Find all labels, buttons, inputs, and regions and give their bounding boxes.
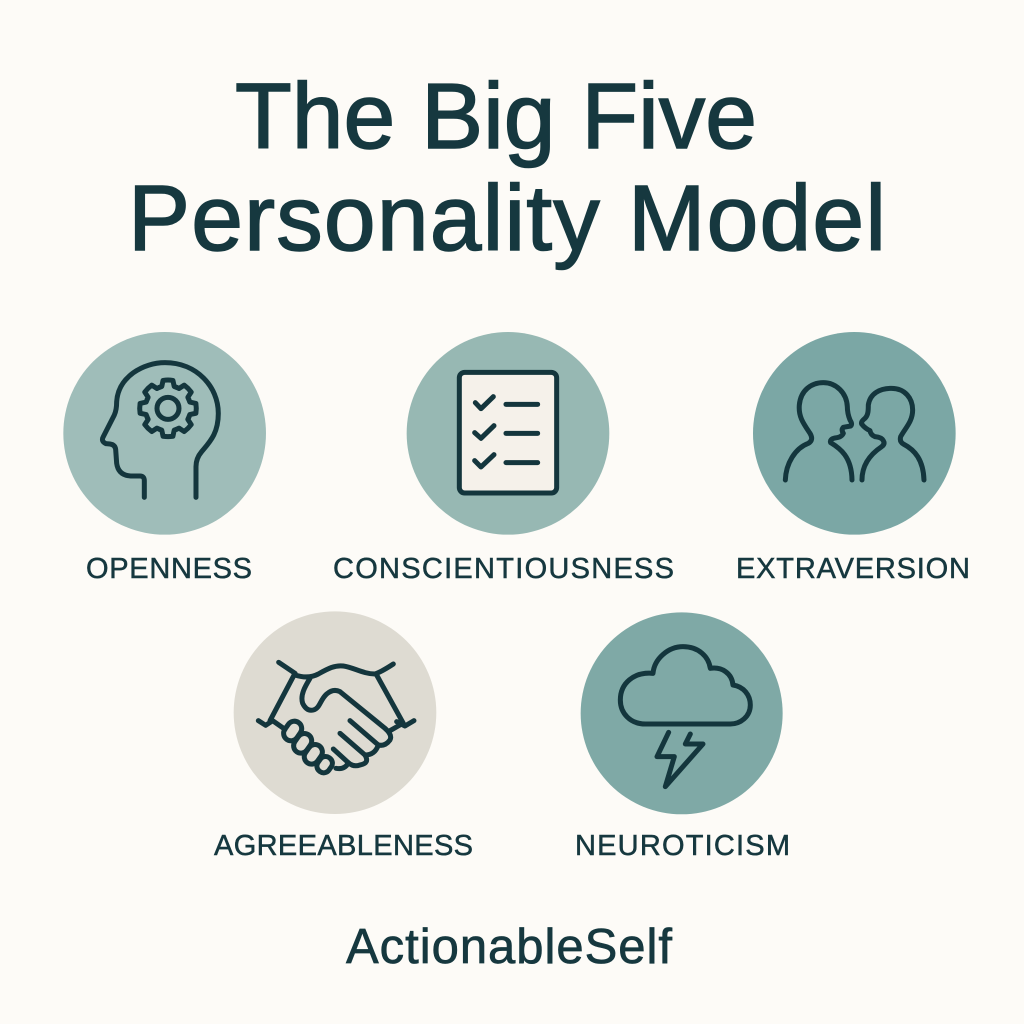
icon: storm cloud bbox=[581, 612, 783, 814]
title: The Big Five bbox=[235, 64, 757, 168]
panel: openness bbox=[63, 332, 266, 585]
label: neuroticism: NEUROTICISM bbox=[575, 830, 790, 862]
icon: head with gear bbox=[63, 332, 266, 535]
panel: conscientiousness bbox=[333, 332, 674, 585]
icon: handshake bbox=[234, 611, 436, 814]
title: Personality Model bbox=[128, 166, 886, 270]
panel: agreeableness bbox=[214, 611, 473, 862]
label: agreeableness: AGREEABLENESS bbox=[214, 830, 473, 862]
label: conscientiousness: CONSCIENTIOUSNESS bbox=[333, 553, 674, 585]
title bbox=[128, 64, 886, 270]
icon: checklist bbox=[407, 332, 609, 535]
label: openness: OPENNESS bbox=[86, 553, 252, 585]
label: extraversion: EXTRAVERSION bbox=[736, 553, 970, 585]
panel: neuroticism bbox=[575, 612, 790, 862]
icon: two faces bbox=[753, 332, 956, 535]
brand name: ActionableSelf bbox=[346, 920, 672, 974]
panel: extraversion bbox=[736, 332, 970, 585]
